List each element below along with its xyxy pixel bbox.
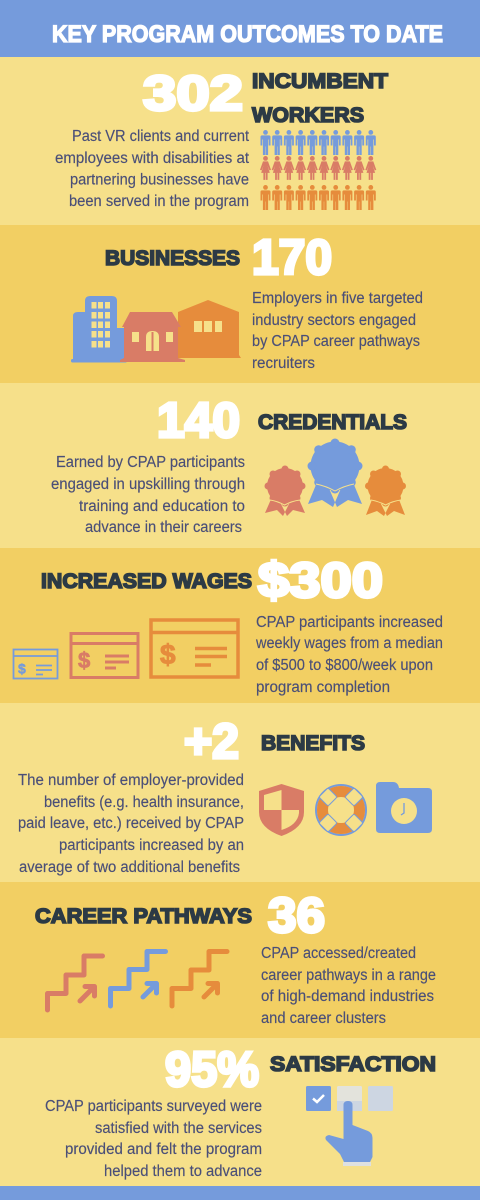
text: benefits description: paid leave, etc.) received by CPAP — [18, 815, 244, 832]
text: career pathways description: of high-demand industries — [261, 988, 434, 1005]
icon: buildings — [71, 296, 241, 362]
panel: incumbent workers — [55, 67, 388, 210]
icon: lifebuoy — [316, 785, 366, 835]
heading: incumbent workers — [252, 69, 388, 127]
text: incumbent workers description: partnering businesses have — [70, 172, 249, 188]
panel: credentials — [51, 394, 407, 536]
stat: $300: $300 — [258, 554, 383, 608]
text: businesses description: industry sectors engaged — [252, 312, 416, 329]
bottom bar — [0, 1186, 480, 1200]
heading: benefits: BENEFITS — [261, 731, 365, 755]
icon: orange medal — [365, 466, 406, 516]
stat: +2: +2 — [184, 715, 239, 769]
text: satisfaction description: helped them to advance — [104, 1163, 262, 1180]
icon: coral medal — [264, 466, 306, 516]
heading: businesses: BUSINESSES — [105, 246, 240, 270]
text: incumbent workers description — [55, 128, 250, 210]
heading: satisfaction: SATISFACTION — [270, 1052, 436, 1076]
text: businesses description — [252, 290, 423, 372]
panel: satisfaction — [45, 1043, 436, 1180]
icon: large orange pay check: $ — [160, 639, 176, 670]
heading: credentials: CREDENTIALS — [258, 410, 407, 434]
stat: 140: 140 — [157, 394, 240, 448]
text: benefits description: average of two additional benefits — [19, 859, 240, 876]
panel: businesses — [71, 231, 423, 372]
text: businesses description: Employers in five targeted — [252, 290, 423, 307]
text: wages description: CPAP participants increased — [256, 614, 443, 631]
heading: career pathways: CAREER PATHWAYS — [35, 904, 252, 928]
icon: coral stairs with arrow — [48, 956, 102, 1010]
heading: incumbent workers: INCUMBENT — [252, 69, 388, 93]
text: businesses description: recruiters — [252, 355, 315, 372]
panel: career pathways — [35, 889, 436, 1027]
stat: 36: 36 — [268, 889, 325, 943]
icon: medium coral pay check — [71, 634, 138, 678]
text: credentials description — [51, 454, 245, 536]
text: benefits description: benefits (e.g. health insurance, — [44, 794, 244, 811]
text: benefits description: The number of employer-provided — [18, 772, 244, 789]
stat: 302: 302 — [143, 67, 243, 121]
heading: incumbent workers: WORKERS — [252, 103, 364, 127]
text: credentials description: advance in their careers — [85, 519, 242, 536]
icon: small blue pay check: $ — [18, 660, 26, 676]
text: wages description: program completion — [256, 679, 390, 696]
text: incumbent workers description: Past VR clients and current — [72, 128, 250, 145]
heading: increased wages: INCREASED WAGES — [41, 569, 252, 593]
text: satisfaction description — [45, 1098, 262, 1180]
text: incumbent workers description: been served in the program — [69, 193, 249, 210]
icon: rows of people — [260, 130, 376, 210]
text: satisfaction description: satisfied with the services — [95, 1120, 262, 1137]
panel: increased wages — [14, 554, 443, 696]
icon: orange stairs with arrow — [172, 952, 227, 1006]
icon: blue stairs with arrow — [110, 952, 166, 1006]
text: credentials description: training and education to — [79, 498, 245, 515]
icon: small blue pay check — [14, 650, 58, 678]
text: benefits description — [18, 772, 244, 876]
text: satisfaction description: CPAP participants surveyed were — [45, 1098, 262, 1115]
stat: 170: 170 — [252, 231, 332, 285]
text: career pathways description: career pathways in a range — [261, 967, 436, 984]
panel: benefits — [18, 715, 432, 876]
text: incumbent workers description: employees with disabilities at — [55, 150, 250, 167]
text: career pathways description — [261, 945, 436, 1027]
text: wages description: weekly wages from a median — [255, 635, 443, 652]
text: career pathways description: and career clusters — [261, 1010, 386, 1027]
text: credentials description: engaged in upskilling through — [51, 476, 245, 493]
text: benefits description: participants increased by an — [59, 837, 244, 854]
text: career pathways description: CPAP accessed/created — [261, 945, 416, 962]
icon: large orange pay check — [151, 620, 238, 677]
text: wages description — [255, 614, 443, 696]
icon: blue medal — [308, 438, 362, 507]
stat: 95%: 95% — [165, 1043, 259, 1097]
icon: shield — [259, 784, 304, 836]
text: wages description: of $500 to $800/week upon — [256, 657, 433, 674]
text: credentials description: Earned by CPAP participants — [56, 454, 245, 471]
icon: folder with clock — [376, 782, 432, 833]
icon: medium coral pay check: $ — [78, 648, 90, 673]
text: businesses description: by CPAP career pathways — [252, 333, 420, 350]
text: satisfaction description: provided and felt the program — [65, 1141, 262, 1158]
title banner — [0, 0, 480, 57]
icon: checkbox selection with hand — [306, 1086, 393, 1166]
